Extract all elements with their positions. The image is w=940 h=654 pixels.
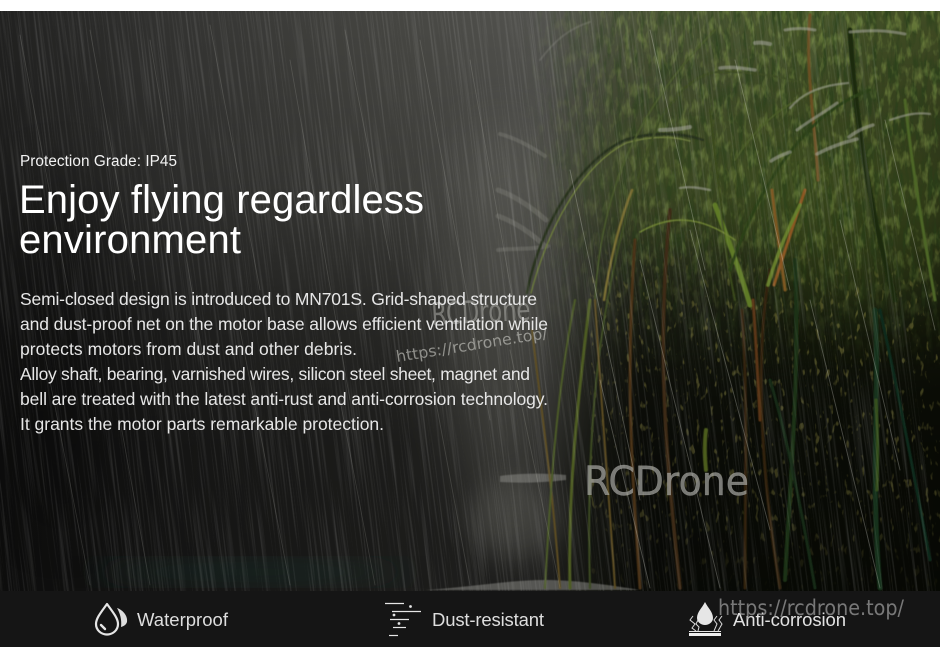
body text: and dust-proof net on the motor base allows efficient ventilation while (20, 314, 548, 334)
watermark: small url: https://rcdrone.top/ (395, 324, 550, 366)
heading: Enjoy flying regardless (19, 178, 424, 222)
heading: environment (19, 218, 241, 262)
body text: protects motors from dust and other debris. (20, 339, 357, 359)
body text (20, 289, 548, 434)
water reflections (425, 474, 640, 590)
label: anti-corrosion: Anti-corrosion (733, 609, 846, 630)
pale grass wisps in the mist (498, 22, 590, 250)
eyebrow: protection grade: Protection Grade: IP45 (20, 153, 177, 170)
body text: bell are treated with the latest anti-rust and anti-corrosion technology. (20, 389, 548, 409)
label: waterproof: Waterproof (137, 609, 229, 630)
label: dust-resistant: Dust-resistant (432, 609, 544, 630)
icon: water drops (96, 604, 127, 634)
feature bar (0, 591, 940, 647)
watermark: small RCDrone: RCDrone (431, 292, 531, 333)
body text: Alloy shaft, bearing, varnished wires, silicon steel sheet, magnet and (20, 364, 530, 384)
body text: Semi-closed design is introduced to MN701S. Grid-shaped structure (20, 289, 537, 309)
icon: corrosion-proof drop (689, 602, 722, 636)
reed seed feathers (660, 28, 930, 190)
heading (19, 178, 424, 262)
watermark: bar url: https://rcdrone.top/ (718, 596, 905, 621)
watermark: large RCDrone: RCDrone (584, 459, 749, 505)
body text: It grants the motor parts remarkable protection. (20, 414, 384, 434)
icon: dust filter lines (385, 604, 421, 636)
reed and grass stems (527, 15, 935, 588)
